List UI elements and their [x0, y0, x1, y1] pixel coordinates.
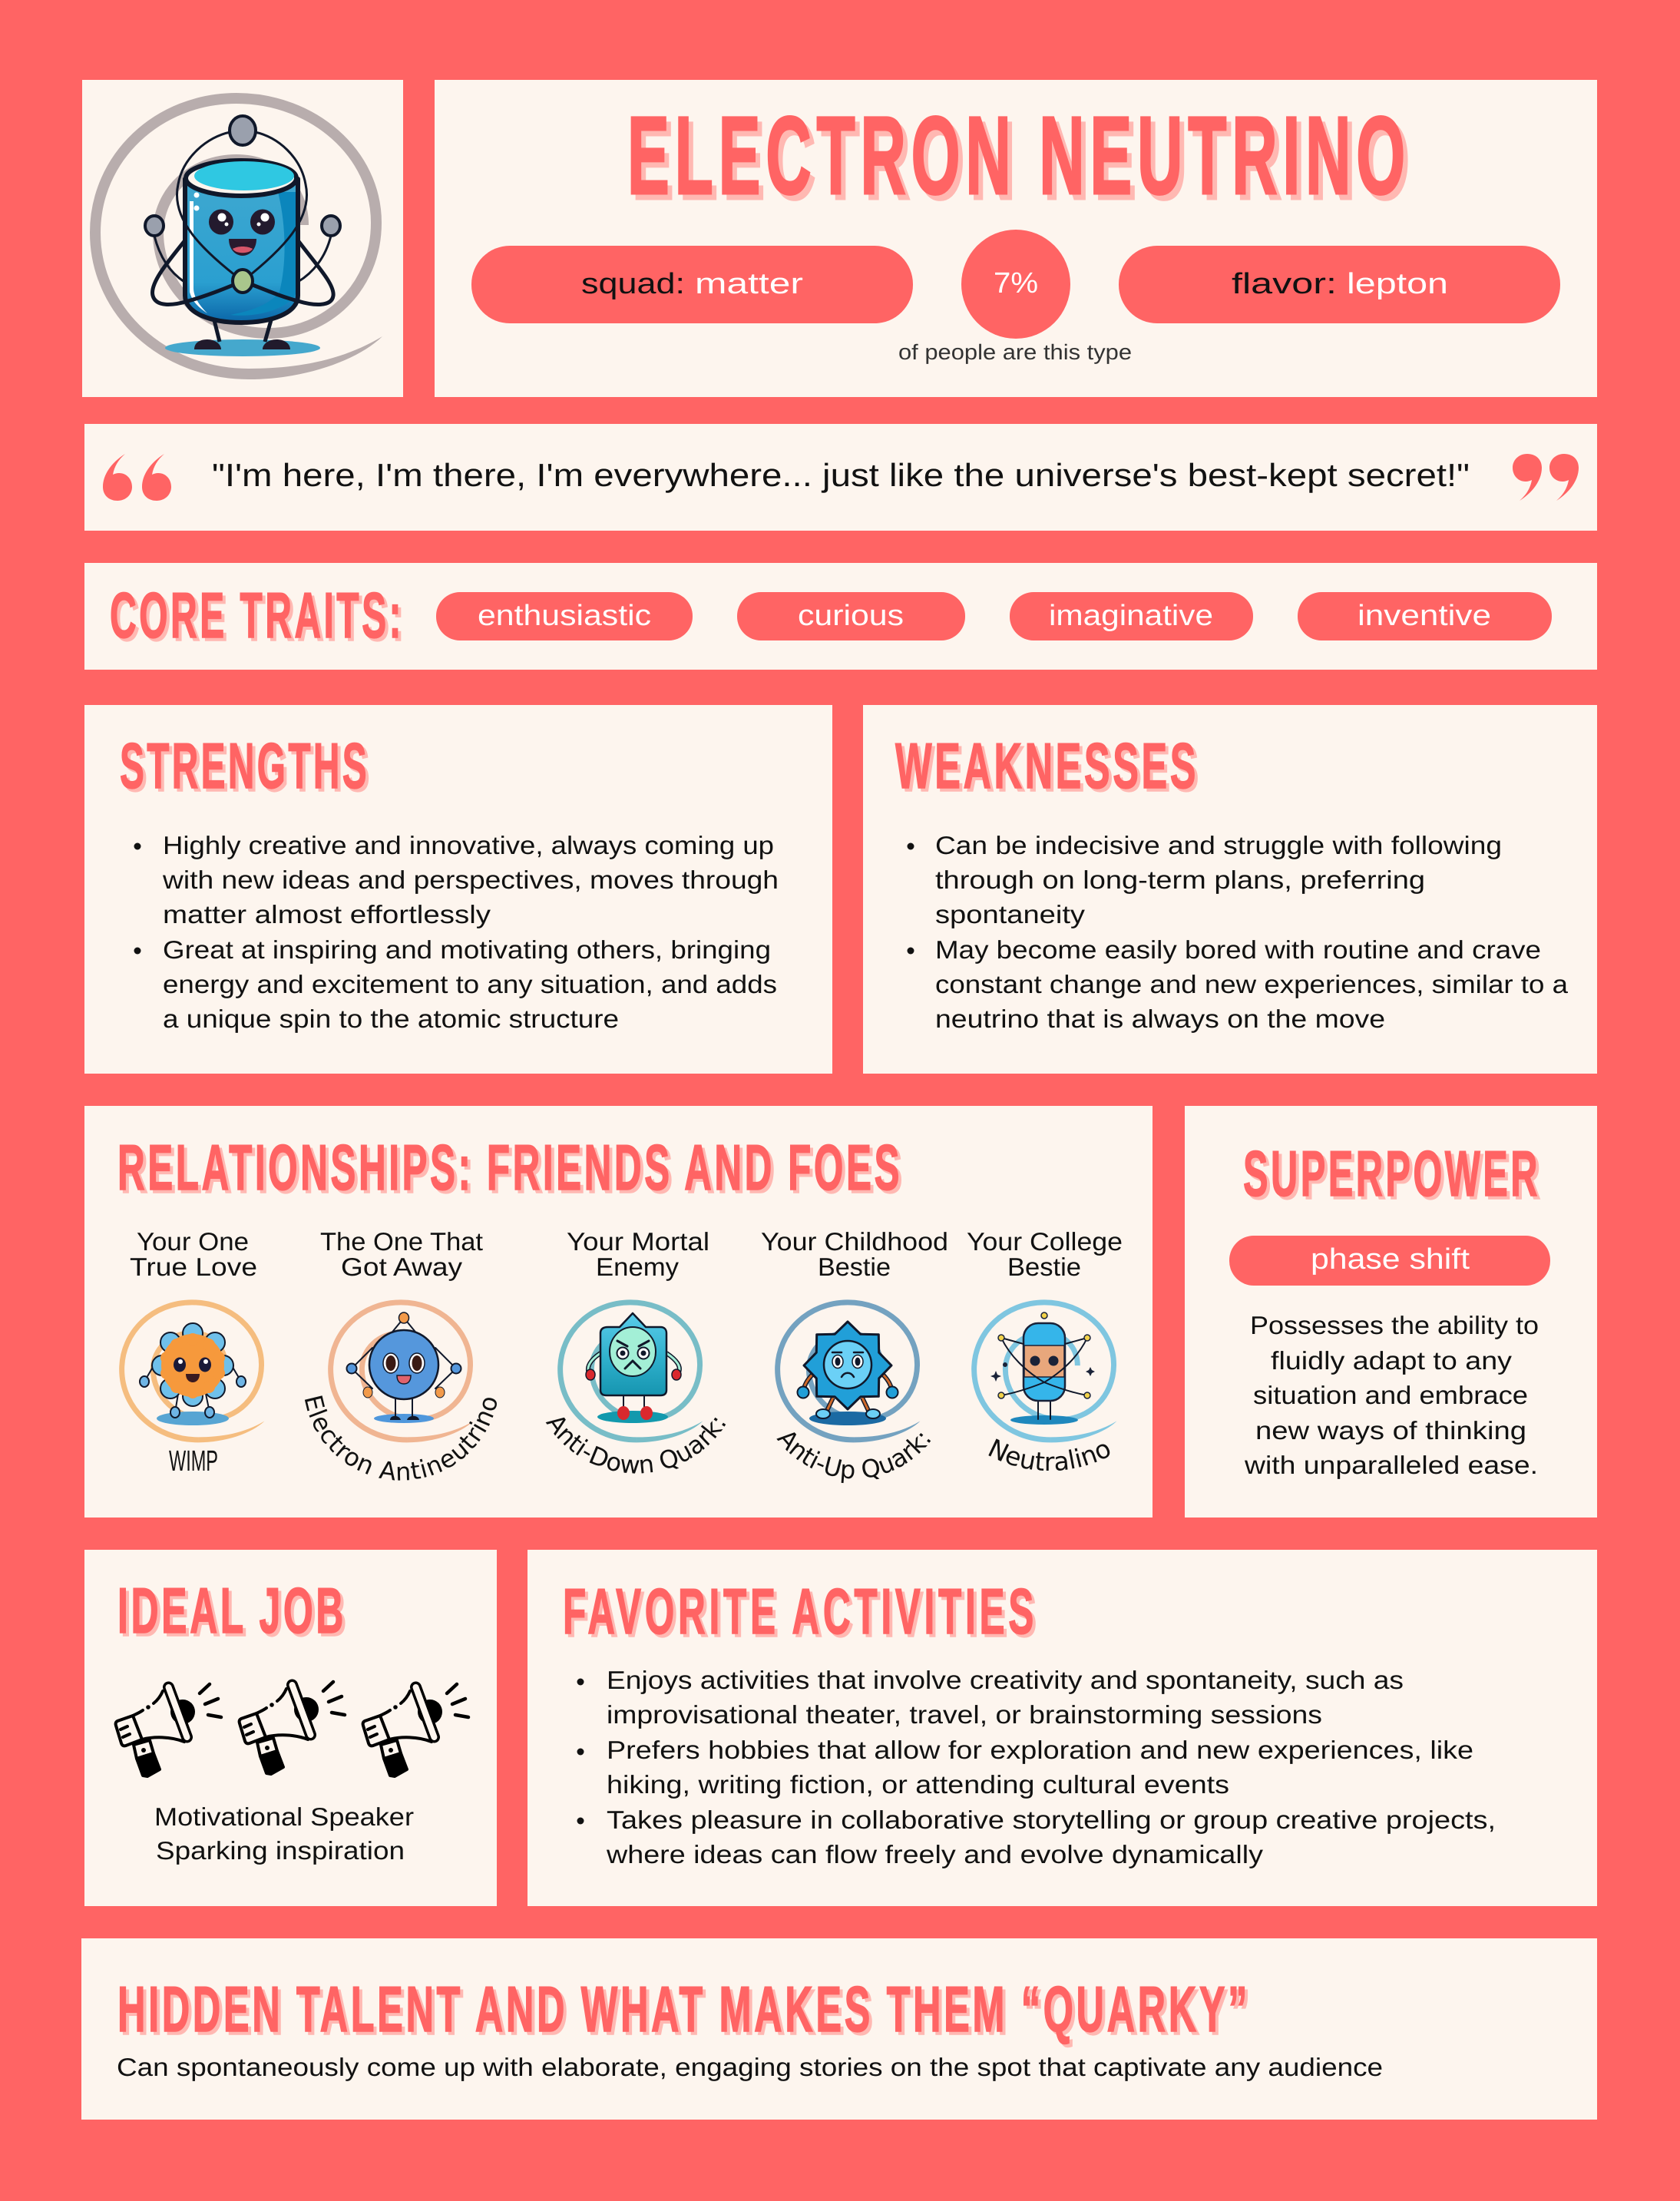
relation: your mortal enemy: Your Mortal — [567, 1227, 709, 1256]
trait: enthusiastic — [436, 592, 693, 640]
strengths list: Great at inspiring and motivating others, bringing — [163, 935, 771, 964]
weaknesses list — [908, 831, 1569, 1033]
relation: your mortal enemy: Enemy — [596, 1253, 680, 1281]
relation: your childhood bestie: Your Childhood — [761, 1227, 948, 1256]
relation: your college bestie — [967, 1227, 1123, 1471]
heading: relationships: RELATIONSHIPS: FRIENDS AND FOES — [117, 1131, 902, 1203]
icon: electron antineutrino character — [331, 1302, 474, 1442]
panel: mascot portrait — [82, 80, 403, 397]
stat: 7 percent — [961, 230, 1070, 339]
superpower description: situation and embrace — [1253, 1381, 1528, 1409]
heading: core traits: CORE TRAITS: — [110, 579, 404, 651]
pill: flavor: flavor: — [1232, 268, 1337, 300]
icon: electron neutrino mascot — [95, 98, 382, 379]
heading: weaknesses: WEAKNESSES — [895, 730, 1199, 802]
relation: your one true love: True Love — [130, 1253, 257, 1281]
label: Anti-Down Quark: Anti-Down Quark: — [545, 1418, 726, 1474]
weaknesses list: Can be indecisive and struggle with following — [935, 831, 1502, 859]
panel: favorite activities — [527, 1550, 1597, 1906]
icon: neutralino character — [974, 1302, 1117, 1442]
pill: squad — [471, 246, 913, 323]
caption: of people are this type — [898, 340, 1132, 364]
icon: megaphone 3 — [363, 1684, 468, 1776]
favorite activities list: Enjoys activities that involve creativity and spontaneity, such as — [607, 1666, 1404, 1694]
favorite activities list — [577, 1666, 1496, 1868]
relation: the one that got away: Got Away — [341, 1253, 463, 1281]
panel: weaknesses — [863, 705, 1597, 1074]
icon: WIMP character — [122, 1302, 265, 1442]
hidden talent description: Can spontaneously come up with elaborate, engaging stories on the spot that captivate any audience — [117, 2053, 1383, 2081]
strengths list: energy and excitement to any situation, and adds — [163, 970, 777, 998]
relation: your childhood bestie: Bestie — [818, 1253, 891, 1281]
trait: enthusiastic: enthusiastic — [478, 600, 651, 632]
label: Electron Antineutrino: Electron Antineutrino — [304, 1395, 497, 1481]
superpower description: with unparalleled ease. — [1244, 1451, 1538, 1479]
ideal job text: Motivational Speaker — [154, 1802, 414, 1831]
trait: inventive — [1298, 592, 1552, 640]
relation: your one true love — [122, 1227, 265, 1478]
panel: hidden talent — [81, 1938, 1597, 2120]
strengths list: with new ideas and perspectives, moves through — [162, 866, 779, 894]
panel: core traits — [84, 563, 1597, 670]
relation: the one that got away: The One That — [320, 1227, 483, 1256]
trait: imaginative — [1010, 592, 1253, 640]
panel: ideal job — [84, 1550, 497, 1906]
superpower description: new ways of thinking — [1255, 1416, 1526, 1445]
icon: anti-down quark character — [561, 1302, 703, 1442]
panel: strengths — [84, 705, 832, 1074]
strengths list: a unique spin to the atomic structure — [163, 1005, 619, 1033]
ideal job text — [154, 1802, 414, 1865]
heading: favorite activities: FAVORITE ACTIVITIES — [563, 1575, 1037, 1647]
pill: phase shift: phase shift — [1311, 1243, 1470, 1276]
weaknesses list: constant change and new experiences, similar to a — [935, 970, 1569, 998]
relation: your mortal enemy — [545, 1227, 726, 1474]
label: Anti-Up Quark: Anti-Up Quark: — [776, 1432, 931, 1484]
weaknesses list: neutrino that is always on the move — [935, 1005, 1385, 1033]
weaknesses list: through on long-term plans, preferring — [935, 866, 1425, 894]
panel: title — [435, 80, 1597, 397]
trait: curious — [737, 592, 965, 640]
strengths list — [134, 831, 779, 1033]
icon: closing quotation mark — [1513, 454, 1579, 501]
pill: flavor — [1119, 246, 1560, 323]
pill: flavor: lepton — [1347, 268, 1448, 300]
favorite activities list: where ideas can flow freely and evolve dynamically — [606, 1840, 1264, 1868]
favorite activities list: Prefers hobbies that allow for exploration and new experiences, like — [607, 1736, 1473, 1764]
label: WIMP: WIMP — [169, 1445, 218, 1478]
strengths list: Highly creative and innovative, always coming up — [163, 831, 774, 859]
relation: your childhood bestie — [761, 1227, 948, 1484]
relation: the one that got away — [304, 1227, 497, 1481]
heading: strengths: STRENGTHS — [120, 730, 369, 802]
heading: ideal job: IDEAL JOB — [117, 1574, 346, 1647]
icon: megaphone 1 — [116, 1684, 221, 1776]
ideal job text: Sparking inspiration — [156, 1836, 405, 1865]
weaknesses list: spontaneity — [935, 900, 1086, 928]
relation: your college bestie: Bestie — [1007, 1253, 1081, 1281]
weaknesses list: May become easily bored with routine and crave — [935, 935, 1541, 964]
superpower description: fluidly adapt to any — [1271, 1346, 1513, 1375]
panel: superpower — [1185, 1106, 1597, 1518]
favorite activities list: hiking, writing fiction, or attending cultural events — [607, 1770, 1229, 1799]
favorite activities list: Takes pleasure in collaborative storytelling or group creative projects, — [607, 1805, 1496, 1834]
pill: squad: squad: — [581, 268, 685, 300]
panel: quote — [84, 424, 1597, 531]
icon: anti-up quark character — [778, 1302, 921, 1442]
pill: squad: matter — [695, 268, 803, 300]
superpower description — [1244, 1311, 1539, 1479]
icon: opening quotation mark — [103, 454, 171, 501]
trait: imaginative: imaginative — [1049, 600, 1213, 632]
icon: megaphone 2 — [240, 1682, 345, 1774]
quote text: "I'm here, I'm there, I'm everywhere... just like the universe's best-kept secret!" — [212, 457, 1470, 493]
relation: your college bestie: Your College — [967, 1227, 1123, 1256]
stat: 7 percent: 7% — [994, 267, 1038, 300]
trait: curious: curious — [798, 600, 904, 632]
superpower description: Possesses the ability to — [1250, 1311, 1539, 1339]
trait: inventive: inventive — [1358, 600, 1491, 632]
strengths list: matter almost effortlessly — [163, 900, 491, 928]
relation: your one true love: Your One — [137, 1227, 249, 1256]
panel: relationships — [84, 1106, 1153, 1518]
favorite activities list: improvisational theater, travel, or brainstorming sessions — [607, 1700, 1322, 1729]
pill: phase shift — [1229, 1236, 1550, 1286]
label: Neutralino: Neutralino — [988, 1438, 1110, 1471]
